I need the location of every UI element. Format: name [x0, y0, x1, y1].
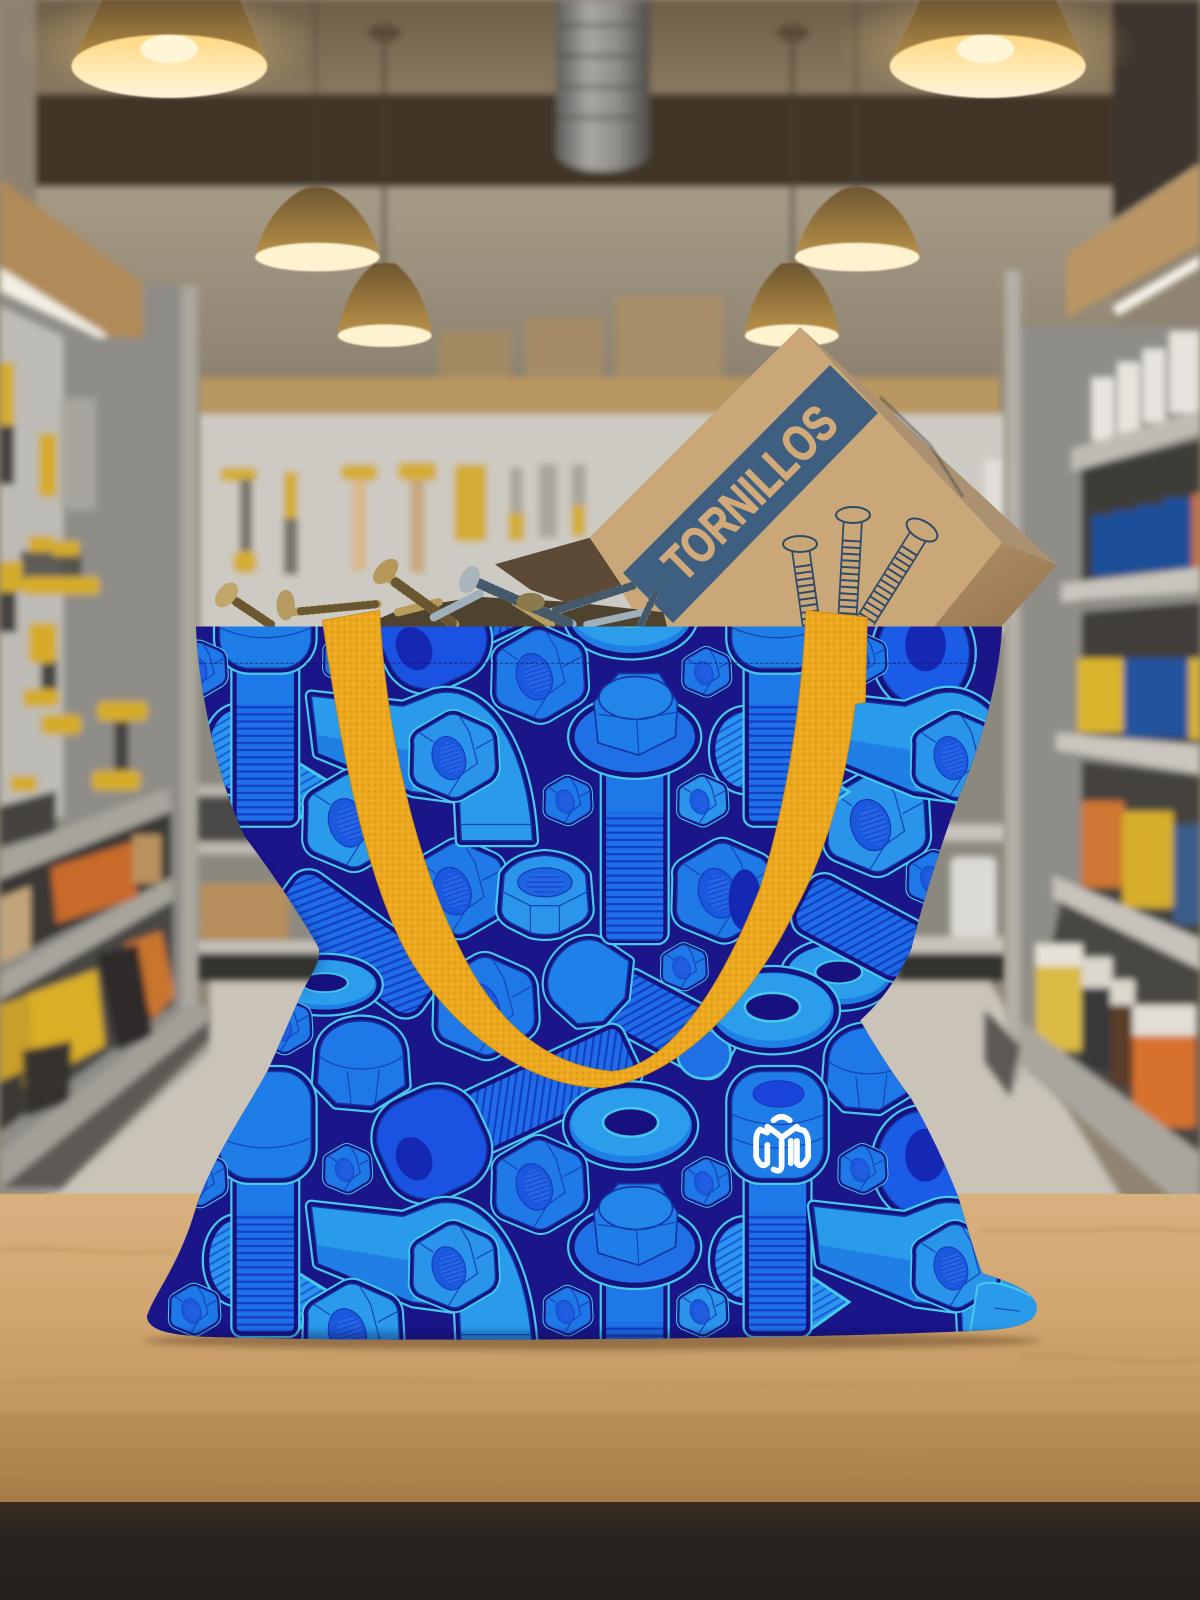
- nut, lower right: [827, 1027, 912, 1110]
- logo bolt socket: [732, 1081, 824, 1124]
- cap nut, left: [317, 1021, 405, 1106]
- wooden counter: [0, 1194, 1200, 1600]
- blue strip with product name: TORNILLOS: [652, 395, 848, 591]
- nut, right: [828, 773, 926, 872]
- repeating pattern, lower row: [171, 1006, 1035, 1451]
- ceiling lamps: [16, 0, 1140, 347]
- bag printed pattern: [147, 626, 1037, 1340]
- top hem stitching: [199, 662, 998, 664]
- nut, small left: [276, 1002, 314, 1056]
- tote bag: [147, 610, 1037, 1340]
- yellow bag straps: [322, 610, 867, 1088]
- box front face: [590, 327, 1002, 640]
- pile of screws in the bag: [210, 538, 668, 631]
- diagonal bolt, center: [542, 934, 736, 1080]
- cardboard box labelled TORNILLOS: [590, 327, 1057, 640]
- white brand logo: [756, 1117, 808, 1171]
- big nut, center: [676, 843, 771, 939]
- small nut, center: [663, 945, 706, 989]
- fold shading: [282, 885, 329, 992]
- threaded bolt, right diagonal: [791, 874, 926, 981]
- washer, left: [272, 959, 377, 1010]
- blue strip with product name: [623, 365, 878, 623]
- back wall with shelf and hanging tools: [194, 296, 1005, 985]
- washer, right 2: [710, 971, 835, 1049]
- bolt end: [678, 1030, 731, 1079]
- lower back shelves: [194, 633, 321, 985]
- nut, lower right tip: [969, 1282, 1037, 1331]
- open box flap: [495, 538, 624, 604]
- box top side: [800, 327, 1057, 565]
- left shelving: [0, 179, 209, 1199]
- box right side: [920, 543, 1057, 630]
- hex nut, center: [501, 855, 589, 935]
- printed mark on box side: [880, 397, 963, 497]
- right shelving: [985, 163, 1200, 1199]
- washer, right 1: [786, 943, 892, 1006]
- nut, far right: [905, 848, 940, 904]
- floor: [41, 982, 1122, 1199]
- ceiling: [0, 0, 1200, 381]
- nut under strap: [438, 957, 535, 1055]
- screw drawings on box: [783, 507, 941, 630]
- threaded bolt, left diagonal: [282, 868, 432, 1020]
- repeating pattern, upper row: [196, 626, 990, 946]
- nut, left center: [413, 843, 504, 934]
